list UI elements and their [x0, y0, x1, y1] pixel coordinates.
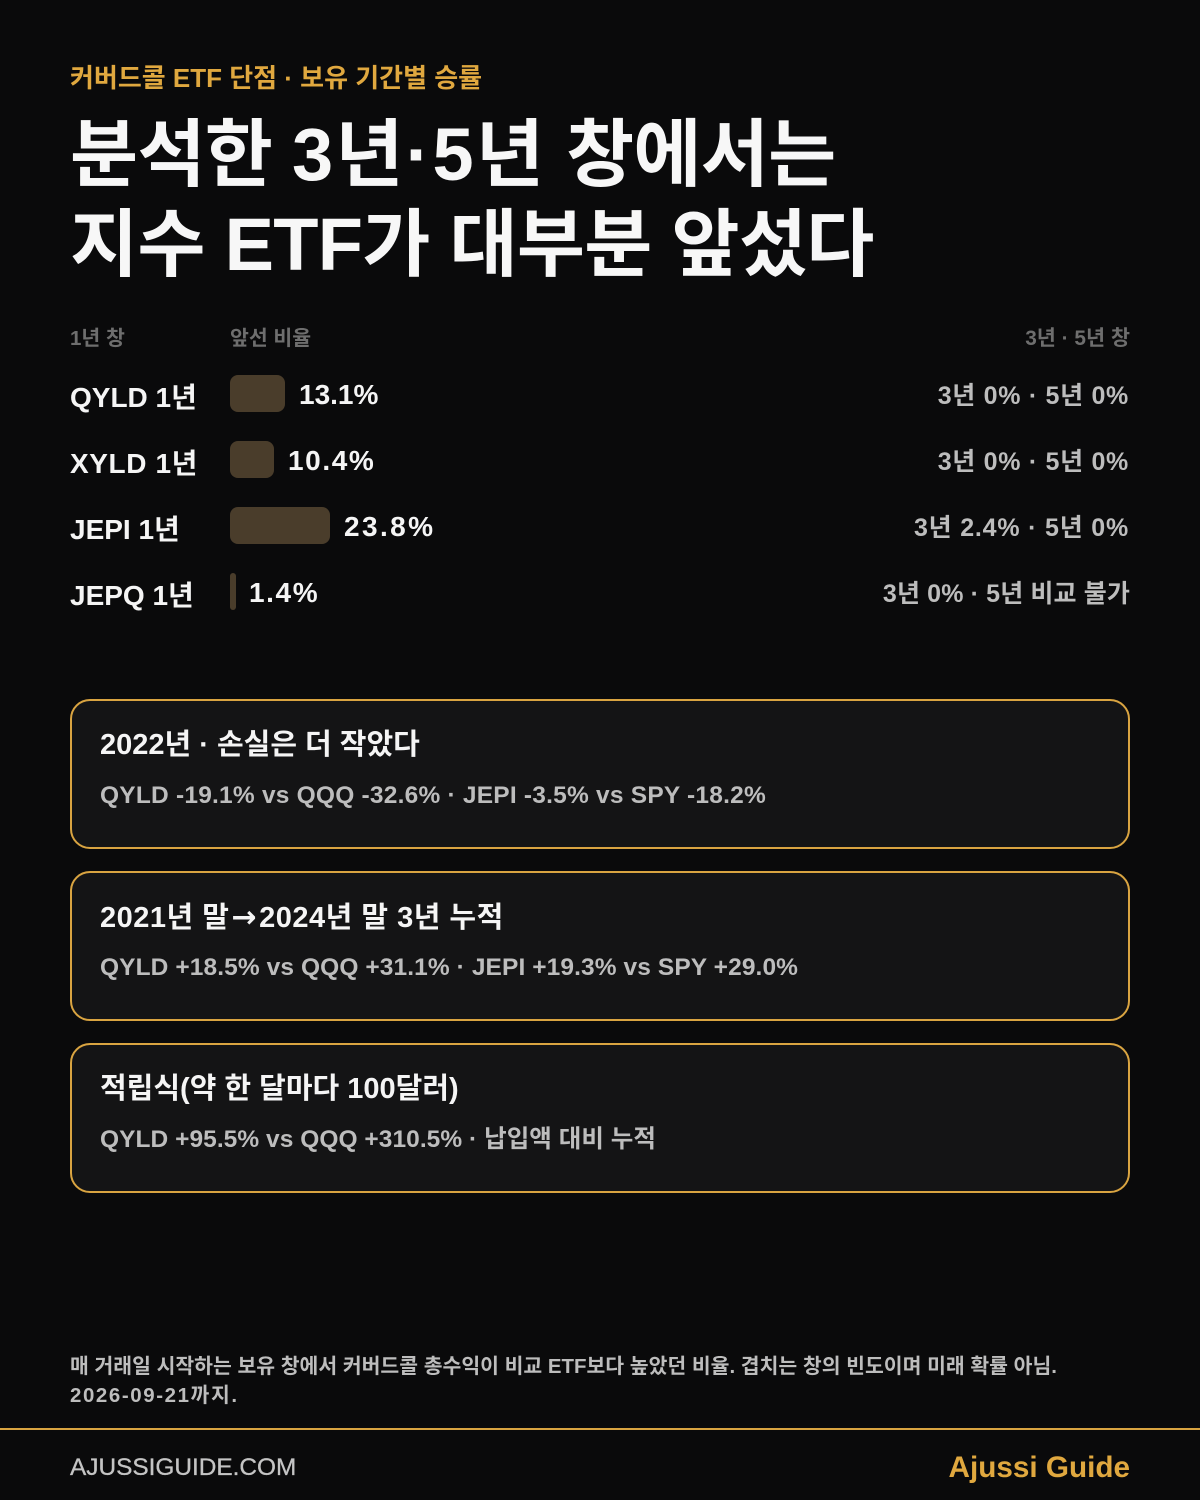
comparison: 3년 0% · 5년 0% [938, 448, 1129, 476]
footer rule [0, 1428, 1200, 1430]
card heading: 2021년 말→2024년 말 3년 누적 [100, 900, 504, 935]
table header: ratio: 앞선 비율 [230, 327, 311, 350]
card text: QYLD +18.5% vs QQQ +31.1% · JEPI +19.3% vs SPY +29.0% [100, 954, 798, 981]
title: 분석한 3년·5년 창에서는 [70, 113, 836, 196]
panel: monthly investing [70, 1043, 1130, 1193]
card heading: 적립식(약 한 달마다 100달러) [100, 1073, 459, 1105]
row: JEPI [70, 507, 1129, 545]
bar [230, 573, 236, 610]
footnote [70, 1355, 1057, 1407]
title: 지수 ETF가 대부분 앞섰다 [70, 203, 874, 286]
bar [230, 507, 330, 544]
value: 1.4% [249, 577, 319, 608]
label: XYLD 1년 [70, 448, 198, 479]
bar [230, 375, 285, 412]
comparison: 3년 2.4% · 5년 0% [914, 514, 1129, 542]
row: XYLD [70, 441, 1129, 479]
label: JEPQ 1년 [70, 580, 194, 611]
row: JEPQ [70, 573, 1130, 611]
card text: QYLD -19.1% vs QQQ -32.6% · JEPI -3.5% vs SPY -18.2% [100, 782, 766, 809]
card text: QYLD +95.5% vs QQQ +310.5% · 납입액 대비 누적 [100, 1126, 656, 1153]
eyebrow: 커버드콜 ETF 단점 · 보유 기간별 승률 [70, 63, 482, 93]
footnote: 매 거래일 시작하는 보유 창에서 커버드콜 총수익이 비교 ETF보다 높았던 비율. 겹치는 창의 빈도이며 미래 확률 아님. [70, 1355, 1057, 1378]
footer brand: Ajussi Guide [949, 1451, 1130, 1484]
panel: 2022 loss [70, 699, 1130, 849]
label: JEPI 1년 [70, 514, 180, 545]
footnote: 2026-09-21까지. [70, 1384, 239, 1407]
comparison: 3년 0% · 5년 0% [938, 382, 1129, 410]
label: QYLD 1년 [70, 382, 197, 413]
title [70, 113, 874, 286]
table header: window: 1년 창 [70, 327, 125, 350]
table header: 3y 5y: 3년 · 5년 창 [1025, 327, 1130, 350]
row: QYLD [70, 375, 1129, 413]
value: 13.1% [299, 379, 378, 410]
footer site: AJUSSIGUIDE.COM [70, 1454, 296, 1481]
value: 10.4% [288, 445, 375, 476]
comparison: 3년 0% · 5년 비교 불가 [883, 580, 1130, 608]
value: 23.8% [344, 511, 435, 542]
panel: 3 year cumulative [70, 871, 1130, 1021]
card heading: 2022년 · 손실은 더 작았다 [100, 729, 420, 761]
bar [230, 441, 274, 478]
